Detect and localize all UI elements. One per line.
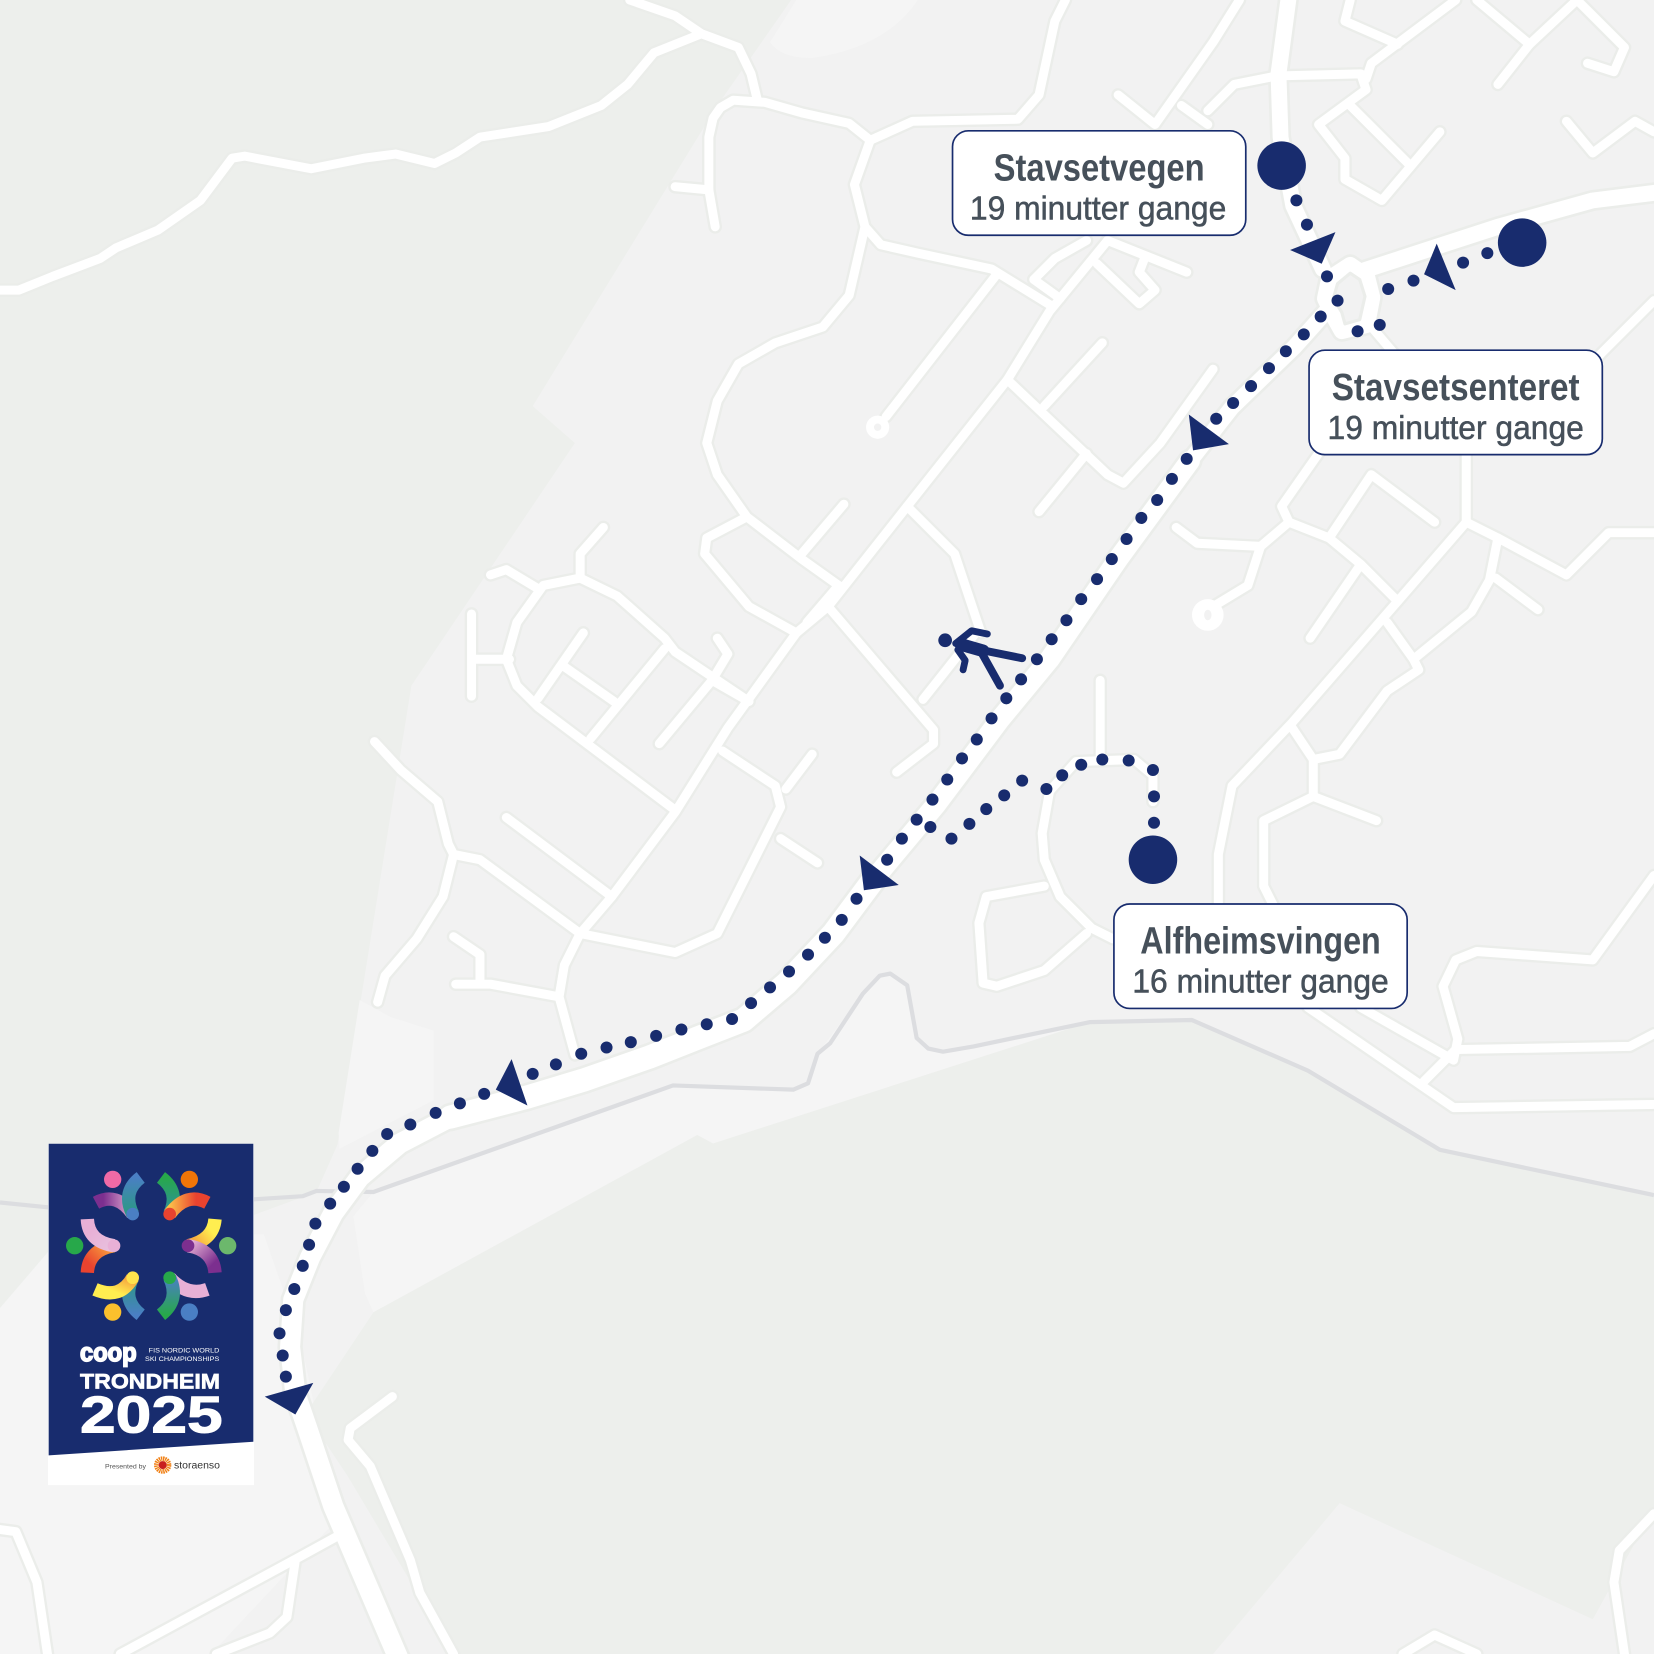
logo panel: Coop FIS Nordic World Ski Championships Trondheim 2025 <box>48 1144 254 1485</box>
figure: top-right <box>161 1171 207 1220</box>
figure: right <box>182 1219 236 1273</box>
cul-de-sac circles <box>866 416 1224 631</box>
logo emblem <box>66 1171 236 1321</box>
presented by: Presented by <box>105 1463 147 1470</box>
route: Stavsetsenteret dotted line <box>1352 247 1493 337</box>
light area: south-west <box>0 1234 338 1654</box>
callout: Alfheimsvingen: 16 minutter gange <box>1132 963 1389 1001</box>
championship name: SKI CHAMPIONSHIPS <box>145 1356 220 1363</box>
light patch: west of road <box>339 1000 434 1149</box>
coop wordmark: coop <box>80 1337 137 1367</box>
figure: top-left <box>96 1171 141 1220</box>
callout: Stavsetvegen: Stavsetvegen <box>994 147 1205 189</box>
callout: Stavsetsenteret <box>1309 350 1602 455</box>
callout: Stavsetvegen <box>953 131 1246 235</box>
figure: left <box>66 1219 120 1273</box>
logo background <box>48 1144 254 1485</box>
forest: south-east <box>306 1018 1654 1654</box>
callout: Alfheimsvingen: Alfheimsvingen <box>1140 921 1381 963</box>
Trondheim heading: TRONDHEIM <box>80 1369 220 1393</box>
callout: Stavsetsenteret: 19 minutter gange <box>1328 409 1584 447</box>
light patch: north <box>770 0 918 58</box>
callout: Stavsetvegen: 19 minutter gange <box>970 189 1226 227</box>
start point: Stavsetvegen <box>1257 141 1306 190</box>
figure: bottom-left <box>95 1271 141 1321</box>
icon: walking person <box>938 631 1022 686</box>
championship name: FIS NORDIC WORLD <box>149 1348 220 1355</box>
start point: Alfheimsvingen <box>1129 835 1177 884</box>
roundabout island <box>1333 273 1365 324</box>
storaenso wordmark: storaenso <box>174 1460 220 1471</box>
callout: Alfheimsvingen <box>1114 904 1407 1008</box>
light area: along railway <box>353 974 1090 1312</box>
arrow: direction markers <box>265 232 1456 1415</box>
championship name <box>145 1348 220 1363</box>
2025 heading: 2025 <box>80 1386 223 1444</box>
figure: bottom-right <box>161 1271 207 1321</box>
railway line <box>0 974 1654 1208</box>
icon: Stora Enso sun <box>156 1459 169 1471</box>
forest: north-west <box>0 0 791 1308</box>
callout: Stavsetsenteret: Stavsetsenteret <box>1332 367 1580 409</box>
start point: Stavsetsenteret <box>1498 218 1546 267</box>
route: Alfheimsvingen dotted line <box>924 753 1160 845</box>
route: Stavsetvegen dotted line <box>274 194 1344 1383</box>
